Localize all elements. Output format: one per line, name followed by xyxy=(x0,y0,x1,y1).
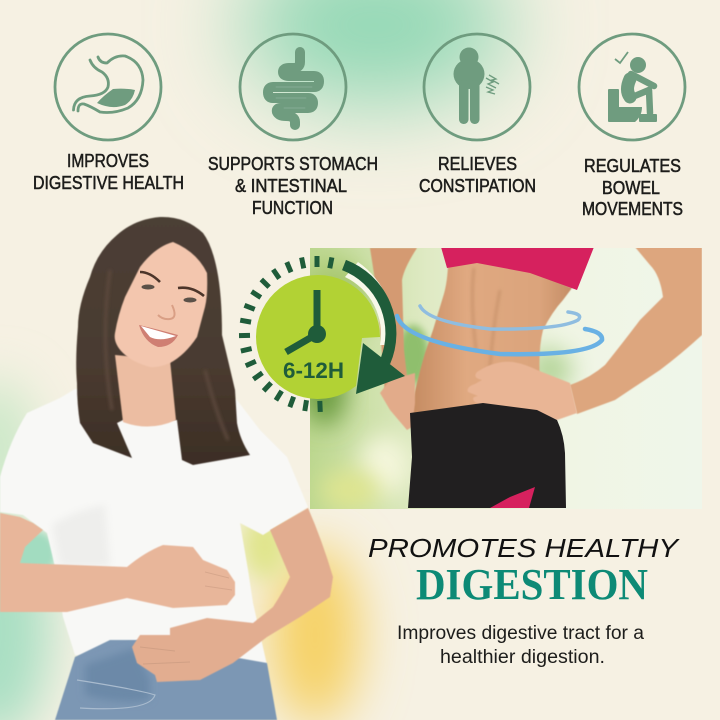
smile xyxy=(139,325,178,347)
clock xyxy=(239,256,405,412)
pink sports bra xyxy=(441,247,594,290)
photo: toned torso xyxy=(300,247,702,510)
shirt shadow xyxy=(52,505,110,566)
description: healthier digestion. xyxy=(440,647,605,668)
icon row xyxy=(55,34,685,140)
finger lines upper hand xyxy=(205,572,232,590)
icon: person on toilet xyxy=(579,34,685,140)
label: regulates bowel movements: MOVEMENTS xyxy=(582,198,683,219)
curved arrow xyxy=(344,265,405,394)
icon: person with stomach pain xyxy=(424,34,530,140)
pale halo around clock xyxy=(345,262,393,345)
heading xyxy=(368,533,680,609)
icon: stomach xyxy=(55,34,161,140)
duration label: 6-12H xyxy=(283,358,344,383)
heading: PROMOTES HEALTHY xyxy=(368,533,680,563)
arm across stomach xyxy=(0,513,235,612)
label: relieves constipation xyxy=(419,153,536,196)
clock hands xyxy=(286,290,326,352)
pink panel xyxy=(490,487,535,508)
label: supports stomach and intestinal function: SUPPORTS STOMACH xyxy=(208,153,378,174)
motion rings xyxy=(397,306,602,354)
neck xyxy=(115,355,176,427)
description xyxy=(397,623,644,668)
face xyxy=(115,242,207,367)
shirt xyxy=(0,389,308,665)
black shorts xyxy=(408,403,566,508)
heading: DIGESTION xyxy=(416,560,648,609)
bare midriff xyxy=(410,262,572,414)
hand on hip xyxy=(468,362,577,420)
arm behind arrow xyxy=(370,248,417,395)
label: relieves constipation: CONSTIPATION xyxy=(419,175,536,196)
smiling woman xyxy=(0,217,333,720)
lower hand and arm xyxy=(132,508,333,682)
tick ring xyxy=(239,256,332,412)
label: improves digestive health: IMPROVES xyxy=(67,150,149,171)
label: improves digestive health xyxy=(33,150,184,193)
hair highlights xyxy=(105,270,228,440)
icon: intestines xyxy=(240,34,346,140)
eyes and brows xyxy=(140,272,204,296)
label: supports stomach and intestinal function: FUNCTION xyxy=(252,197,333,218)
jeans xyxy=(55,640,277,720)
label: regulates bowel movements: BOWEL xyxy=(602,177,660,198)
hair xyxy=(76,217,250,465)
label: regulates bowel movements xyxy=(582,155,683,219)
label: relieves constipation: RELIEVES xyxy=(438,153,517,174)
lime clock face xyxy=(256,275,380,399)
right arm xyxy=(570,247,702,414)
finger lines lower hand xyxy=(140,647,190,664)
description: Improves digestive tract for a xyxy=(397,623,644,644)
label: supports stomach and intestinal function xyxy=(208,153,378,218)
label: regulates bowel movements: REGULATES xyxy=(584,155,681,176)
label: improves digestive health: DIGESTIVE HEALTH xyxy=(33,172,184,193)
nose xyxy=(158,305,175,319)
label: supports stomach and intestinal function: & INTESTINAL xyxy=(235,175,347,196)
